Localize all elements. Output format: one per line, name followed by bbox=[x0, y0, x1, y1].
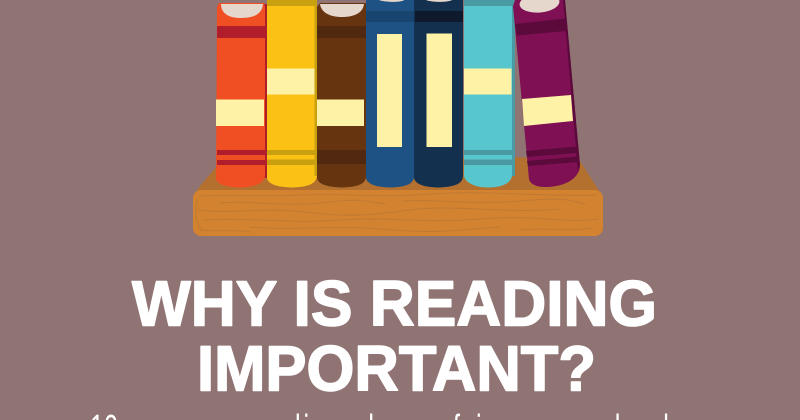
wooden shelf bbox=[193, 157, 603, 236]
subtitle clipped by bottom edge bbox=[90, 407, 669, 420]
title bbox=[132, 268, 657, 404]
title line 2: IMPORTANT? bbox=[197, 332, 596, 404]
book: orange bbox=[216, 3, 267, 188]
book: navy bbox=[414, 0, 463, 188]
book: purple leaning bbox=[513, 0, 580, 187]
title line 1: WHY IS READING bbox=[132, 268, 657, 340]
book: brown bbox=[317, 3, 366, 188]
book: blue bbox=[366, 0, 414, 188]
book: teal bbox=[464, 0, 515, 188]
book: yellow bbox=[267, 0, 317, 188]
